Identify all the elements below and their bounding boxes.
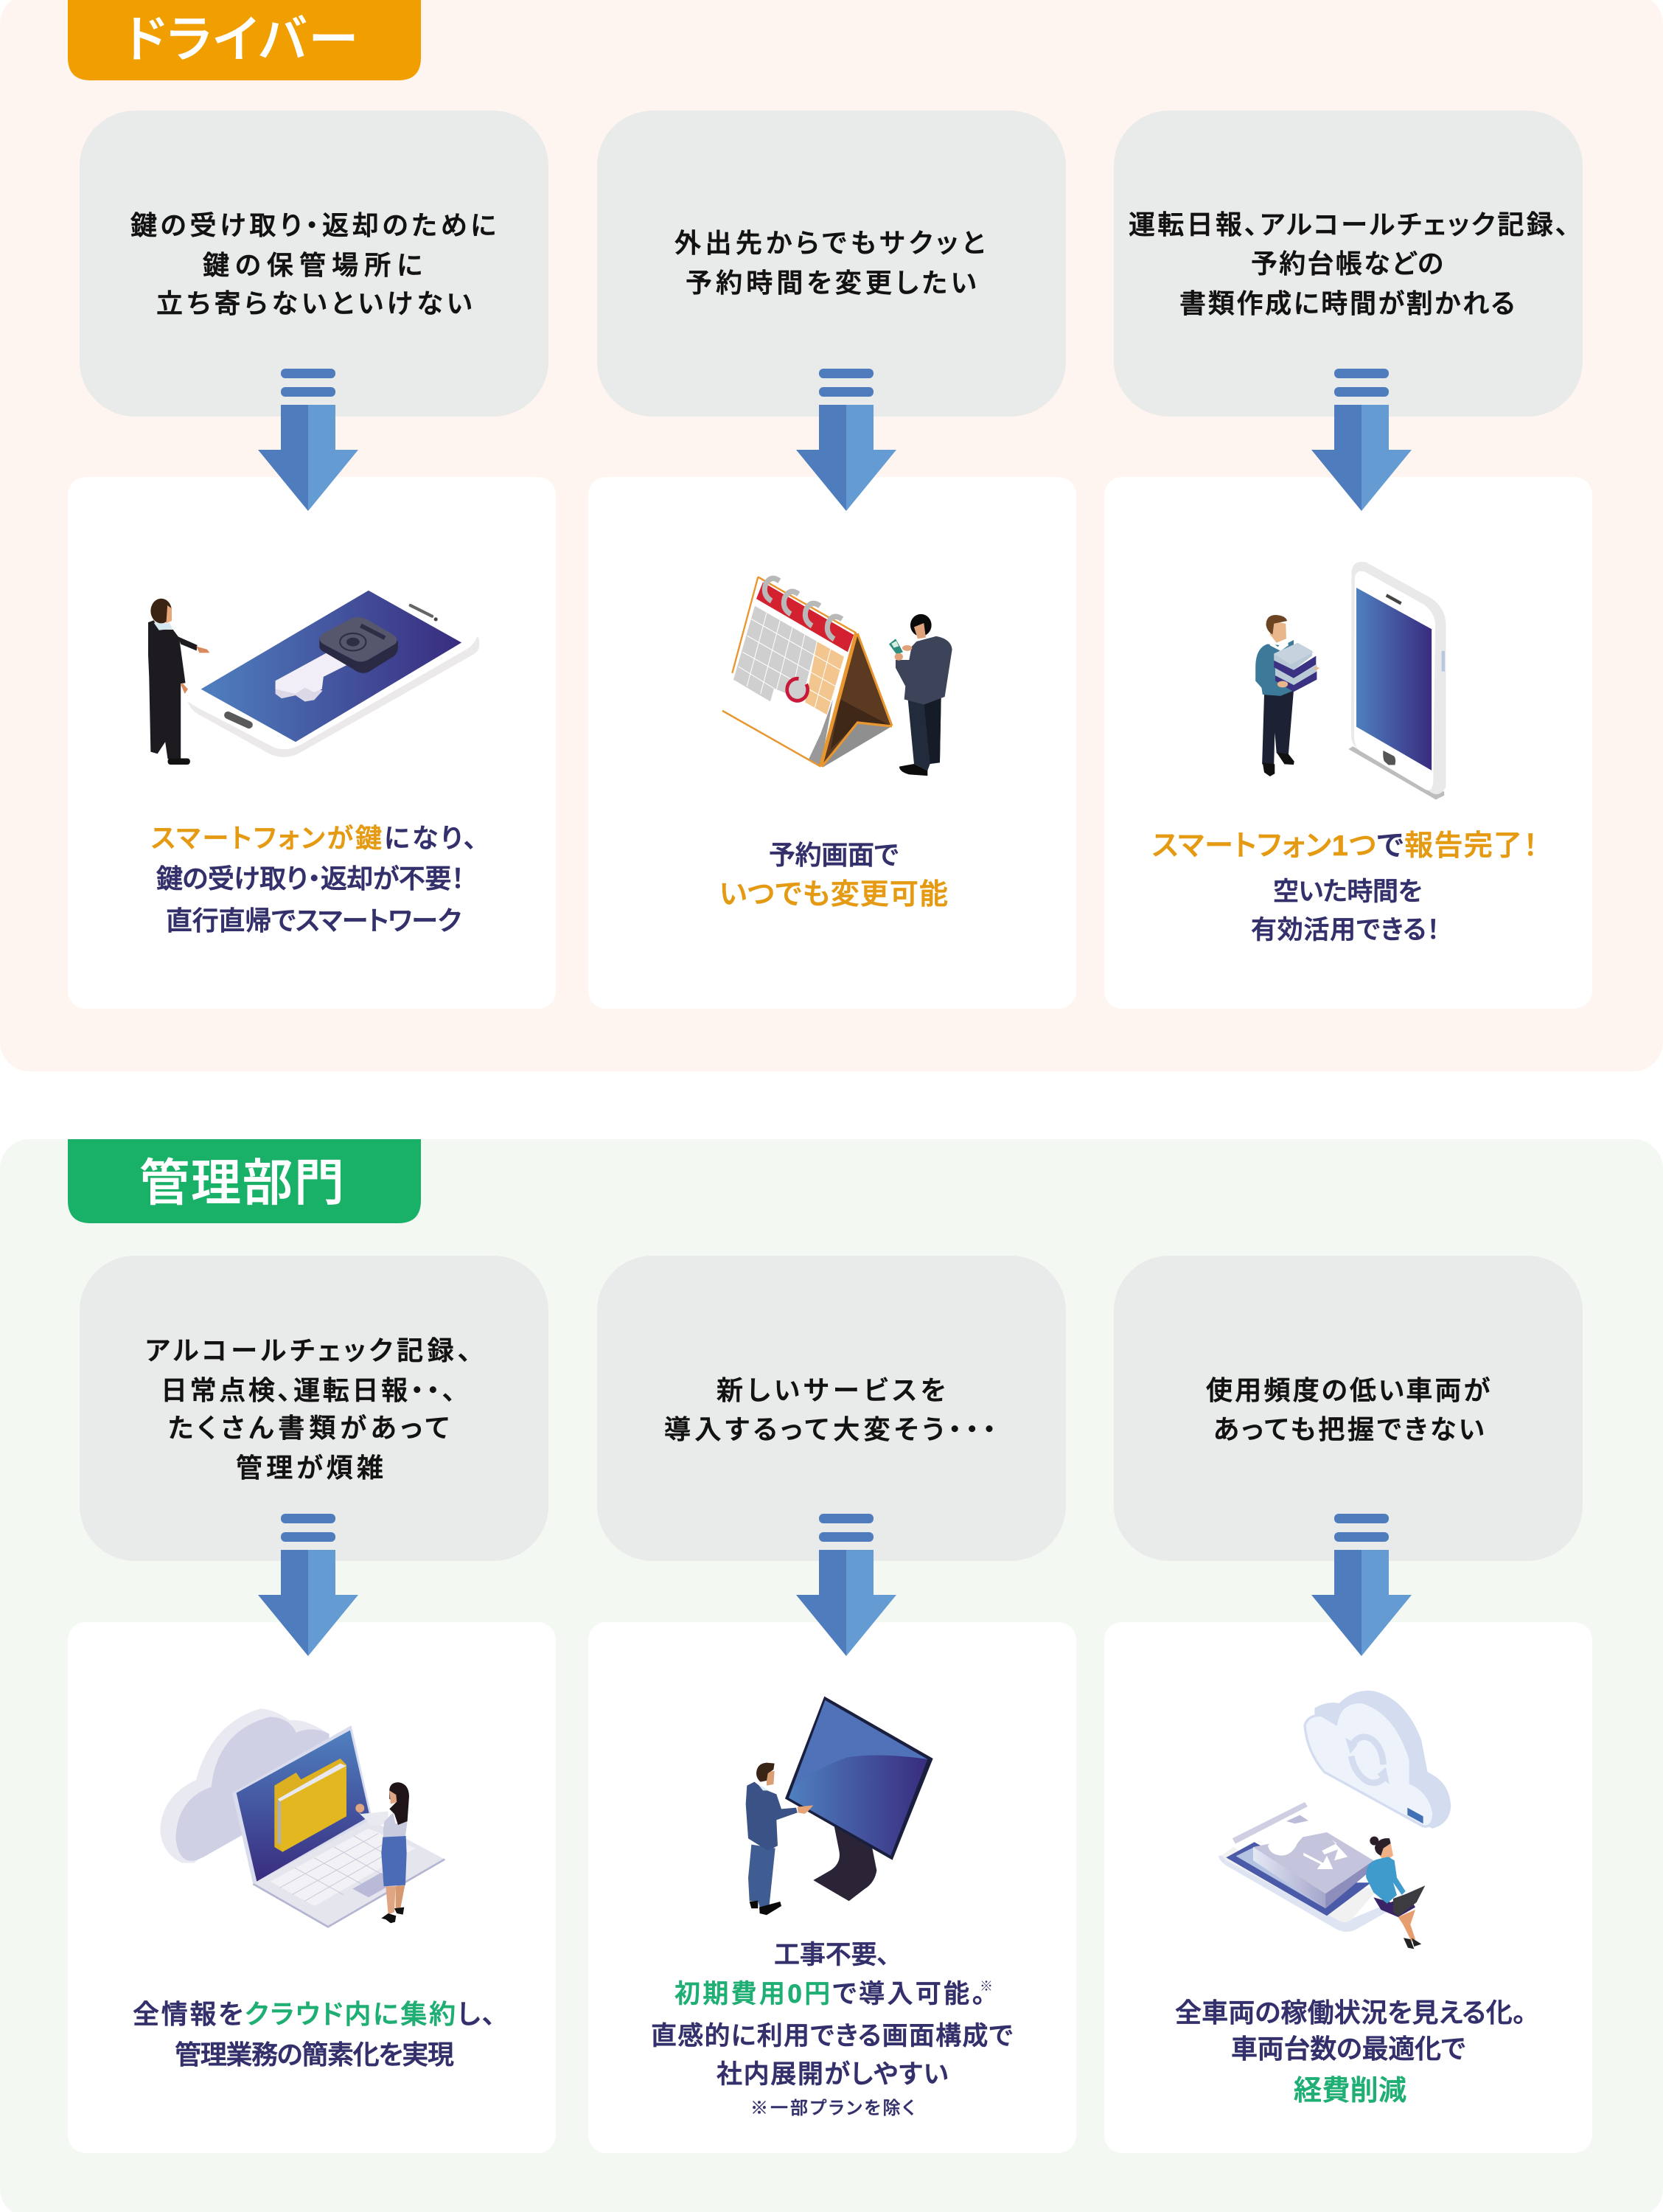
solution card: smartphone key: 鍵の受け取り・返却が不要！ (156, 863, 464, 894)
solution card: vehicle visibility: 経費削減 (1294, 2076, 1406, 2107)
solution card: calendar: いつでも変更可能 (719, 879, 948, 911)
solution card: cloud: 全情報をクラウド内に集約し、 (133, 1999, 495, 2029)
figure: man in blue suit (746, 1763, 813, 1915)
icon: folder (274, 1759, 346, 1852)
heading tag: driver (68, 0, 421, 80)
solution card: easy introduction: ※一部プランを除く (750, 2098, 915, 2118)
problem box: change reservation: 予約時間を変更したい (686, 268, 976, 298)
solution card: vehicle visibility: 車両台数の最適化で (1231, 2034, 1465, 2064)
problem box: key pickup (80, 111, 548, 417)
illustration: phone as key with man (148, 591, 479, 765)
problem box: key pickup: 鍵の保管場所に (203, 250, 422, 280)
solution card: calendar: 予約画面で (769, 840, 899, 870)
solution card: smartphone key: 直行直帰でスマートワーク (166, 905, 461, 936)
solution card: report on phone: 空いた時間を (1273, 877, 1422, 906)
problem box: complex documents: 日常点検、運転日報・・、 (161, 1375, 456, 1405)
solution card: vehicle visibility (1104, 1622, 1592, 2153)
problem box: key pickup: 鍵の受け取り・返却のために (130, 210, 496, 240)
illustration: upright phone with man carrying books (1255, 562, 1446, 799)
problem box: new service: 新しいサービスを (717, 1375, 945, 1405)
solution card: smartphone key: スマートフォンが鍵になり、 (151, 823, 477, 853)
problem box: vehicle usage: あっても把握できない (1213, 1414, 1484, 1444)
arrow: key pickup to solution (258, 369, 358, 511)
problem box: complex documents: 管理が煩雑 (236, 1453, 383, 1483)
solution card: vehicle visibility: 全車両の稼働状況を見える化。 (1175, 1997, 1526, 2028)
solution card: smartphone key (68, 477, 556, 1009)
figure: man with phone (889, 614, 952, 776)
problem box: new service (597, 1256, 1066, 1561)
problem box: new service: 導入するって大変そう・・・ (664, 1414, 996, 1444)
heading tag: management (68, 1139, 421, 1223)
illustration: large display with man (746, 1697, 933, 1915)
arrow: paperwork to solution (1311, 369, 1412, 511)
arrow: vehicle usage to solution (1311, 1514, 1412, 1656)
arrow: new service to solution (796, 1514, 896, 1656)
solution card: easy introduction: 直感的に利用できる画面構成で (651, 2022, 1013, 2051)
problem box: paperwork (1114, 111, 1583, 417)
solution card: report on phone (1104, 477, 1592, 1009)
solution card: easy introduction: 社内展開がしやすい (717, 2060, 948, 2089)
illustration: cloud sync, phone and woman with laptop (1219, 1691, 1451, 1949)
solution card: easy introduction: 初期費用0円で導入可能。 (674, 1980, 985, 2008)
arrow: documents to solution (258, 1514, 358, 1656)
problem box: complex documents (80, 1256, 548, 1561)
problem box: vehicle usage: 使用頻度の低い車両が (1206, 1375, 1491, 1405)
solution card: cloud (68, 1622, 556, 2153)
figure: man with books (1255, 615, 1320, 776)
panel: management (0, 1139, 1663, 2212)
solution card: cloud: 管理業務の簡素化を実現 (175, 2039, 454, 2070)
solution card: easy introduction (588, 1622, 1076, 2153)
solution card: report on phone: スマートフォン1つで報告完了！ (1152, 830, 1538, 862)
heading tag: management: 管理部門 (139, 1155, 344, 1211)
problem box: complex documents: アルコールチェック記録、 (145, 1335, 471, 1366)
solution card: easy introduction: 工事不要、 (774, 1941, 890, 1969)
problem box: change reservation (597, 111, 1066, 417)
figure: woman (355, 1782, 409, 1923)
illustration: calendar with man (722, 577, 952, 776)
illustration: laptop, folder and cloud with woman (160, 1708, 444, 1927)
problem box: key pickup: 立ち寄らないといけない (156, 288, 472, 319)
problem box: change reservation: 外出先からでもサクッと (674, 228, 985, 258)
panel: driver (0, 0, 1663, 1071)
solution card: easy introduction: ※ (980, 1979, 993, 1994)
problem box: vehicle usage (1114, 1256, 1583, 1561)
solution card: calendar (588, 477, 1076, 1009)
arrow: reservation to solution (796, 369, 896, 511)
problem box: paperwork: 書類作成に時間が割かれる (1179, 288, 1515, 319)
figure: woman with laptop (1366, 1837, 1425, 1949)
problem box: paperwork: 運転日報、アルコールチェック記録、 (1129, 209, 1569, 240)
figure: businessman (148, 599, 209, 765)
problem box: paperwork: 予約台帳などの (1251, 248, 1443, 279)
solution card: report on phone: 有効活用できる！ (1251, 916, 1440, 945)
problem box: complex documents: たくさん書類があって (168, 1413, 450, 1443)
heading tag: driver: ドライバー (125, 12, 358, 68)
